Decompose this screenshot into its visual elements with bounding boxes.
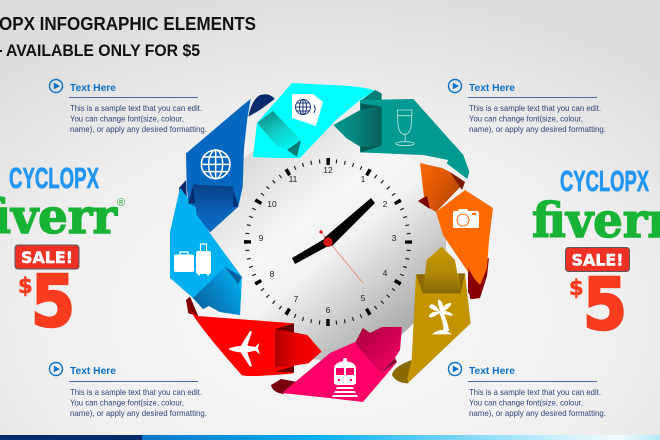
- promo: left: 5: [31, 260, 75, 343]
- ribbon: red, plane: [186, 297, 322, 376]
- text block: bottom right: Text Here: [469, 365, 515, 377]
- text block: top right: You can change font(size, colour,: [469, 114, 583, 124]
- text block: top left: You can change font(size, colour,: [70, 114, 184, 124]
- title: [0, 14, 256, 60]
- ribbon: sky blue, luggage: [170, 180, 242, 315]
- promo: left: CYCLOPX: [9, 163, 99, 195]
- text block: top right: Text Here: [469, 82, 515, 94]
- text block: top left: [50, 80, 207, 134]
- clock numbers: 6: [326, 305, 331, 315]
- icon: globe: [201, 150, 230, 179]
- text block: bottom left: This is a sample text that you can edit.: [70, 387, 202, 397]
- text block: top left: name), or apply any desired formatting.: [70, 124, 207, 134]
- ribbon: gold, palm: [392, 247, 480, 383]
- clock numbers: 12: [323, 165, 333, 175]
- text block: top right: name), or apply any desired formatting.: [469, 124, 606, 134]
- clock numbers: 7: [294, 294, 299, 304]
- text block: bottom right: This is a sample text that you can edit.: [469, 387, 601, 397]
- minute ticks: [247, 161, 409, 323]
- text block: bottom left: Text Here: [70, 365, 116, 377]
- icon: palm: [429, 300, 453, 334]
- text block: bottom left: You can change font(size, colour,: [70, 398, 184, 408]
- icon: plane: [228, 331, 260, 367]
- ribbon: pink, train: [271, 327, 402, 402]
- promo: right: 5: [583, 263, 627, 346]
- clock numbers: 8: [270, 269, 275, 279]
- title: AVAILABLE ONLY FOR $5: [6, 41, 200, 60]
- text block: bottom left: [50, 362, 207, 418]
- title: OPX INFOGRAPHIC ELEMENTS: [0, 14, 256, 34]
- ribbon: teal, wine glass: [333, 90, 469, 179]
- text block: bottom left: name), or apply any desired formatting.: [70, 408, 207, 418]
- second hand: [321, 232, 363, 283]
- text block: bottom right: You can change font(size, colour,: [469, 398, 583, 408]
- promo: right: SALE!: [572, 250, 624, 270]
- clock numbers: 11: [289, 174, 298, 184]
- clock numbers: 10: [267, 199, 277, 209]
- promo: left: ®: [117, 197, 125, 209]
- bottom colour bar: [0, 435, 660, 440]
- icon: wine glass: [396, 110, 414, 146]
- ribbon: blue, globe: [186, 94, 275, 232]
- text block: bottom right: [448, 362, 606, 418]
- icon: luggage: [174, 244, 211, 276]
- promo: left: SALE!: [21, 248, 73, 267]
- clock numbers: 3: [392, 233, 397, 243]
- hour hand: [292, 238, 330, 264]
- clock numbers: [259, 165, 397, 315]
- text block: top right: This is a sample text that you can edit.: [469, 103, 601, 113]
- promo: left: [0, 163, 125, 343]
- promo: right: $: [569, 276, 584, 300]
- hub: [323, 237, 333, 247]
- clock numbers: 2: [383, 199, 388, 209]
- clock: [210, 124, 446, 360]
- icon: camera: [453, 209, 479, 228]
- clock numbers: 1: [361, 174, 366, 184]
- text block: top right: [448, 80, 606, 134]
- clock face: [210, 124, 446, 360]
- promo: right: [532, 166, 660, 346]
- text block: top left: This is a sample text that you can edit.: [70, 103, 202, 113]
- clock numbers: 5: [361, 293, 366, 303]
- text block: bottom right: name), or apply any desired formatting.: [469, 408, 606, 418]
- ribbon: orange, camera: [418, 163, 493, 299]
- icon: train: [332, 358, 358, 397]
- clock numbers: 4: [383, 268, 388, 278]
- text block: top left: Text Here: [70, 82, 116, 94]
- clock numbers: 9: [259, 233, 264, 243]
- minute hand: [324, 198, 375, 246]
- icon: document globe: [292, 94, 323, 126]
- promo: left: $: [18, 274, 33, 298]
- hour ticks: [248, 162, 408, 322]
- ribbon: cyan, document: [253, 83, 375, 158]
